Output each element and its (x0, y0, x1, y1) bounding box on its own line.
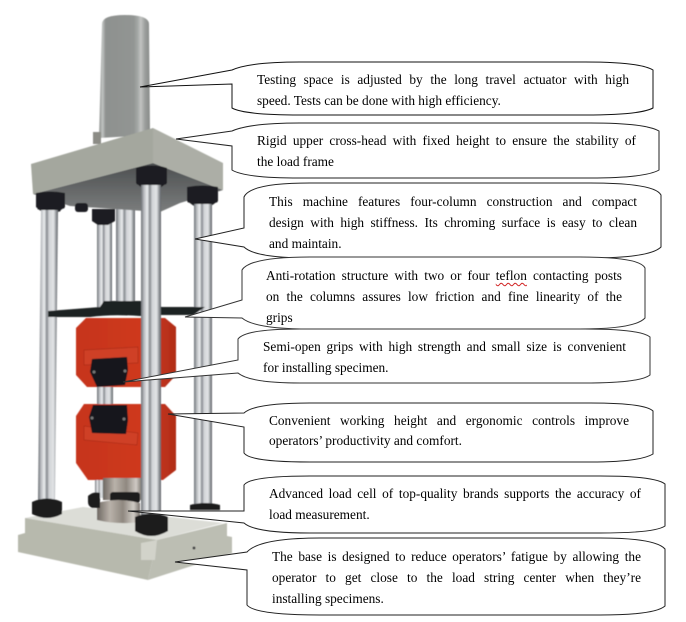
anti-rotation plate (48, 301, 205, 317)
callout bubble (140, 62, 654, 116)
callout bubble (194, 182, 662, 258)
callout bubble (174, 538, 666, 616)
callout bubble (184, 256, 646, 329)
front centre column (141, 185, 161, 520)
callout text: grips (266, 310, 293, 325)
callout: load cell (128, 476, 666, 534)
steel ring (97, 500, 140, 523)
callout text (263, 339, 626, 375)
load cell (103, 478, 142, 503)
base collars (32, 492, 220, 536)
callout: upper cross-head (176, 122, 660, 178)
upper cross-head (31, 128, 223, 212)
callout text: operator to get close to the load string center when they’re (272, 570, 641, 585)
lower red grip (76, 404, 176, 480)
callout text: The base is designed to reduce operators’ fatigue by allowing the (272, 549, 641, 564)
callout text: Anti-rotation structure with two or four teflon contacting posts (266, 268, 622, 283)
callout text (257, 72, 629, 108)
callout text (272, 549, 641, 606)
callout text: on the columns assures low friction and fine linearity of the (266, 289, 622, 304)
upper red grip (76, 318, 176, 387)
callout text (269, 486, 641, 522)
rear columns (95, 190, 135, 498)
callout: base (174, 538, 666, 616)
callout: semi-open grips (123, 328, 650, 384)
callout text: design with high stiffness. Its chroming surface is easy to clean (269, 215, 637, 230)
callout text: This machine features four-column construction and compact (269, 194, 637, 209)
machine base (18, 507, 232, 580)
callout text: load measurement. (269, 507, 370, 522)
callout: four-column construction (194, 182, 662, 258)
callout text (269, 413, 629, 448)
callout bubble (123, 328, 650, 384)
callout text (269, 194, 637, 251)
callout text: for installing specimen. (263, 360, 388, 375)
callout bubble (168, 402, 654, 462)
actuator cylinder (93, 15, 150, 144)
callout text (266, 268, 622, 325)
callout: anti-rotation structure (184, 256, 646, 329)
callout text: Convenient working height and ergonomic controls improve (269, 413, 629, 428)
callout text (257, 133, 636, 169)
callout bubble (128, 476, 666, 534)
callout text: operators’ productivity and comfort. (269, 433, 462, 448)
left and right columns (38, 204, 212, 508)
callout text: and maintain. (269, 236, 342, 251)
callout text: installing specimens. (272, 591, 384, 606)
callout: actuator (140, 62, 654, 116)
callout bubble (176, 122, 660, 178)
callout text: Testing space is adjusted by the long travel actuator with high (257, 72, 629, 87)
callout text: speed. Tests can be done with high efficiency. (257, 93, 501, 108)
column collars under cross-head (36, 166, 218, 225)
callout text: Rigid upper cross-head with fixed height to ensure the stability of (257, 133, 636, 148)
callout text: Semi-open grips with high strength and small size is convenient (263, 339, 626, 354)
callout text: Advanced load cell of top-quality brands supports the accuracy of (269, 486, 641, 501)
callout: working height (168, 402, 654, 462)
callout text: the load frame (257, 154, 334, 169)
